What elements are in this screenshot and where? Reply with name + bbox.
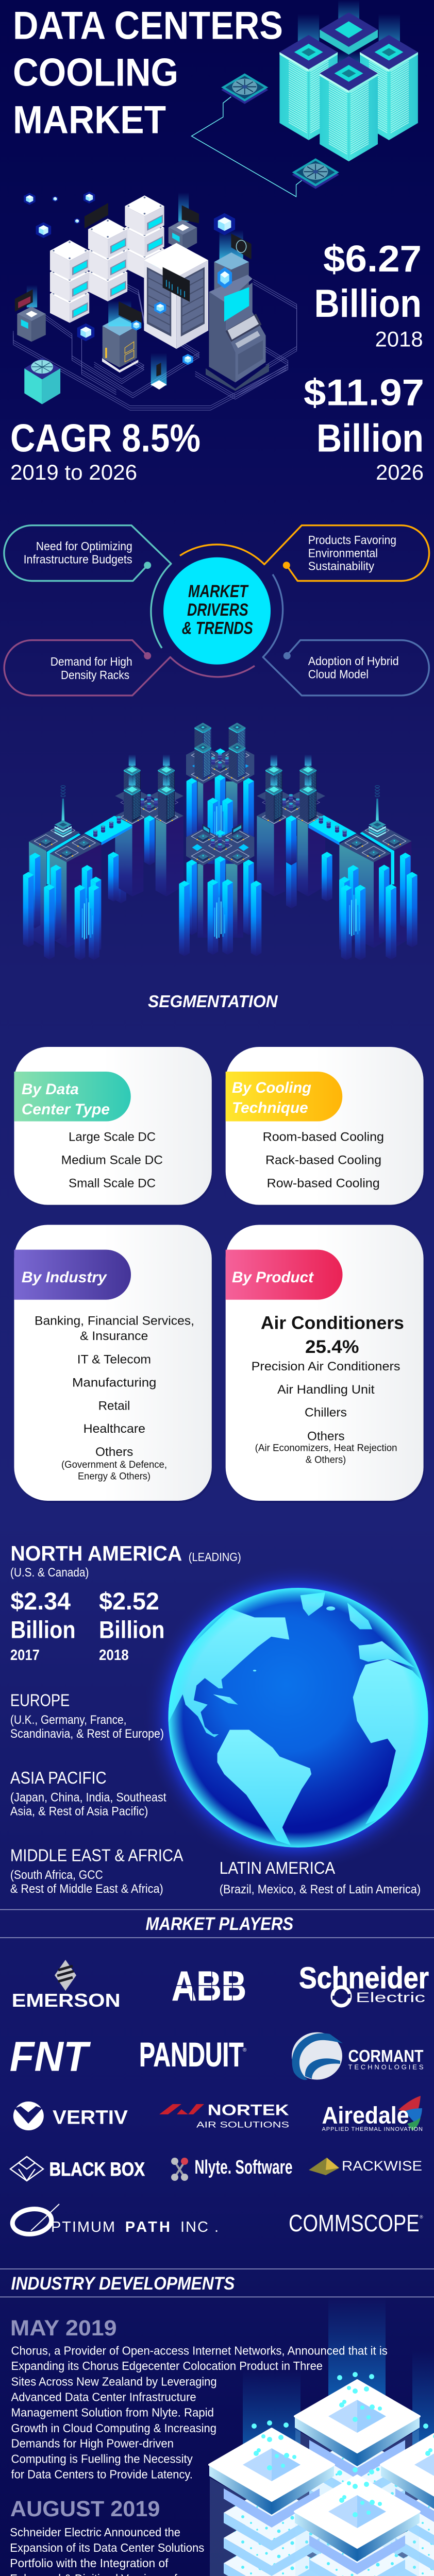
development: May 2019: Advanced Data Center Infrastructure (11, 2391, 196, 2404)
market size 2026: 2026 (376, 460, 424, 484)
panel: by industry: Banking, Financial Services, (35, 1314, 194, 1328)
development: May 2019: Computing is Fuelling the Necessity (11, 2452, 193, 2466)
region: europe: (U.K., Germany, France, (10, 1713, 126, 1727)
illustration: server towers on stacked plates (176, 2297, 434, 2576)
development: May 2019: Demands for High Power-driven (11, 2437, 174, 2450)
panel: by product (226, 1225, 425, 1503)
panel: by product: Air Conditioners (261, 1313, 404, 1333)
icon: laptops (203, 823, 242, 835)
market size 2018: 2018 (375, 327, 423, 351)
panel: by product: Others (307, 1429, 345, 1443)
logo: Nortek Air Solutions: AIR SOLUTIONS (196, 2120, 289, 2130)
panel: by industry: By Industry (22, 1269, 107, 1286)
development: August 2019: Schneider Electric Announced the (10, 2526, 180, 2539)
region: asia pacific (10, 1768, 166, 1818)
driver text: high density racks: Density Racks (61, 668, 129, 682)
development: May 2019: MAY 2019 (10, 2316, 117, 2341)
logo: ABB: ABB (172, 1963, 246, 2010)
logo: Cormant Technologies: CORMANT (348, 2046, 424, 2065)
title: COOLING (13, 51, 178, 95)
callout outlines (4, 526, 429, 696)
driver text: infrastructure budgets (24, 539, 132, 566)
logo: Black Box: BLACK BOX (49, 2159, 145, 2180)
driver text: high density racks (51, 655, 132, 682)
logo: FNT: FNT (10, 2033, 91, 2080)
kiosk terminal and fan cube (24, 267, 269, 404)
region: asia pacific: Asia, & Rest of Asia Pacific) (10, 1804, 148, 1818)
panel: by data center type: Large Scale DC (69, 1130, 156, 1144)
logo: Optimum Path: PTIMUM (51, 2219, 115, 2235)
icon: antenna (369, 786, 386, 837)
center unit (102, 300, 138, 372)
panel: by product: Air Handling Unit (277, 1383, 375, 1397)
panel: by cooling technique: Row-based Cooling (267, 1176, 380, 1190)
region: europe (10, 1691, 164, 1741)
region: middle east and africa: & Rest of Middle East & Africa) (10, 1882, 163, 1896)
development: May 2019 (10, 2316, 388, 2481)
icon: fan cube (24, 358, 60, 404)
skyline: left blocks (23, 786, 126, 960)
panel: by data center type: By Data (22, 1081, 79, 1098)
bridge (84, 816, 132, 845)
region: north america: 2018 (99, 1647, 129, 1664)
panel: by cooling technique: By Cooling (232, 1079, 311, 1096)
logo: CommScope: ® (420, 2214, 423, 2219)
logo: Rackwise (309, 2158, 422, 2175)
skyline: mid-left cluster (84, 754, 183, 902)
panel: by product: & Others) (306, 1455, 346, 1465)
panel: by industry: (Government & Defence, (61, 1460, 167, 1470)
logo: Vertiv (13, 2102, 128, 2130)
center heading: & TRENDS (182, 618, 253, 638)
development: May 2019: Sites Across New Zealand by Leveraging (11, 2375, 216, 2388)
driver text: hybrid cloud: Adoption of Hybrid (308, 654, 399, 668)
driver text: infrastructure budgets: Infrastructure Budgets (24, 553, 132, 566)
panel: by data center type: Center Type (22, 1101, 110, 1118)
region: north america: 2017 (10, 1647, 40, 1664)
center heading (182, 582, 253, 638)
logo: Cormant Technologies: TECHNOLOGIES (348, 2063, 424, 2071)
market size 2018 (314, 239, 423, 351)
icon: floating hexagons (24, 192, 235, 238)
skyline: mid-right cluster (257, 754, 325, 908)
region: middle east and africa: MIDDLE EAST & AFRICA (10, 1845, 183, 1865)
region: middle east and africa: (South Africa, GCC (10, 1868, 103, 1882)
panel: by product: Precision Air Conditioners (252, 1360, 400, 1374)
panel: market drivers and trends (4, 526, 429, 696)
logo: Emerson: EMERSON (12, 1990, 121, 2011)
icon: antenna (55, 786, 72, 837)
region: asia pacific: ASIA PACIFIC (10, 1768, 107, 1787)
server rack (144, 243, 208, 349)
CAGR: CAGR 8.5% (10, 417, 201, 461)
region: north america: Billion (10, 1616, 76, 1643)
logo: Black Box (10, 2157, 145, 2181)
development: May 2019: Management Solution from Nlyte. Rapid (11, 2405, 214, 2419)
skyline: right blocks (308, 786, 418, 960)
driver text: infrastructure budgets: Need for Optimizing (36, 539, 132, 553)
region: north america: $2.34 (10, 1587, 71, 1615)
driver text: environmental sustainability: Products Favoring (308, 533, 396, 547)
region: europe: Scandinavia, & Rest of Europe) (10, 1727, 164, 1741)
heading: segmentation: SEGMENTATION (148, 992, 278, 1011)
icon: hexagons in front (77, 301, 193, 365)
development: May 2019: for Data Centers to Provide Latency. (11, 2468, 193, 2481)
panel: by industry: Healthcare (84, 1422, 145, 1436)
CAGR (10, 417, 201, 484)
development: May 2019: Chorus, a Provider of Open-access Internet Networks, Announced that it is (11, 2344, 388, 2357)
panel: by industry: IT & Telecom (77, 1353, 151, 1367)
development: August 2019 (10, 2497, 204, 2576)
dark info panels (15, 203, 252, 326)
region: north america (10, 1541, 241, 1664)
driver text: hybrid cloud (308, 654, 399, 681)
logo: Airedale (322, 2096, 423, 2132)
development: May 2019: Expanding its Chorus Edgecenter Colocation Product in Three (11, 2359, 323, 2372)
white boxes (50, 195, 164, 323)
panel: by product: (Air Economizers, Heat Rejection (255, 1443, 397, 1454)
center heading: DRIVERS (187, 600, 248, 620)
hero: server illustration (15, 192, 252, 372)
market size 2018: Billion (314, 282, 422, 326)
driver text: high density racks: Demand for High (51, 655, 132, 668)
left unit (17, 307, 46, 342)
globe (143, 1563, 434, 1872)
market size 2018: $6.27 (323, 239, 422, 280)
driver text: environmental sustainability (308, 533, 396, 572)
panel: by data center type: Small Scale DC (69, 1176, 156, 1190)
back unit (169, 220, 197, 251)
skyline: center lower cluster (179, 823, 261, 956)
region: north america: $2.52 (99, 1587, 159, 1615)
panel: by industry: & Insurance (80, 1329, 148, 1343)
region: latin america (220, 1858, 421, 1896)
logo: Nlyte Software: Nlyte. Software (195, 2157, 293, 2178)
development: August 2019: AUGUST 2019 (10, 2497, 160, 2521)
skyline: center upper cluster (186, 723, 254, 873)
continents (166, 1592, 434, 1845)
circuit traces behind equipment (13, 268, 297, 410)
driver text: hybrid cloud: Cloud Model (308, 668, 369, 681)
development: May 2019: Growth in Cloud Computing & Increasing (11, 2421, 216, 2435)
panel: by industry: Manufacturing (72, 1376, 156, 1390)
logo: Nortek Air Solutions: NORTEK (208, 2102, 289, 2119)
market size 2026: Billion (316, 417, 424, 461)
panel: by product: Chillers (305, 1406, 347, 1420)
title (13, 4, 283, 142)
region: north america: Billion (99, 1616, 165, 1643)
panel: by product: By Product (232, 1269, 314, 1286)
logo: Panduit: ® (243, 2047, 247, 2053)
logo: Optimum Path (11, 2204, 219, 2236)
logo: Rackwise: RACKWISE (342, 2158, 422, 2174)
region: middle east and africa (10, 1845, 183, 1896)
panel: by data center type (14, 1047, 213, 1207)
development: August 2019: Expansion of its Data Center Solutions (10, 2541, 204, 2554)
market size 2026 (304, 372, 424, 484)
panel: by cooling technique: Technique (232, 1099, 308, 1116)
region: north america: NORTH AMERICA (10, 1541, 182, 1565)
right unit (214, 252, 249, 300)
bridge (308, 815, 357, 845)
logo: Emerson (12, 1960, 121, 2011)
logo: Optimum Path: INC . (180, 2219, 219, 2235)
hero: data center towers and cooling fans (192, 0, 418, 197)
heading: industry developments: INDUSTRY DEVELOPMENTS (11, 2274, 235, 2294)
panel: by industry: Energy & Others) (78, 1471, 151, 1482)
logo: Panduit: PANDUIT (139, 2036, 244, 2074)
logo: Cormant Technologies (292, 2032, 424, 2080)
driver text: environmental sustainability: Environmental (308, 546, 378, 560)
panel: by industry (14, 1225, 213, 1503)
region: latin america: LATIN AMERICA (220, 1858, 335, 1877)
market size 2026: $11.97 (304, 372, 424, 413)
title: DATA CENTERS (13, 4, 283, 48)
title: MARKET (13, 98, 166, 142)
panel: by product: 25.4% (305, 1337, 359, 1357)
center heading: MARKET (188, 582, 249, 601)
logo: Airedale: APPLIED THERMAL INNOVATION (322, 2126, 423, 2132)
logo: Airedale: Airedale (322, 2102, 409, 2129)
driver text: environmental sustainability: Sustainability (308, 559, 374, 572)
panel: by cooling technique: Room-based Cooling (263, 1130, 384, 1144)
region: north america: (LEADING) (189, 1550, 241, 1564)
logo: Schneider Electric: Electric (356, 1990, 425, 2005)
panel: by data center type: Medium Scale DC (61, 1154, 163, 1167)
region: asia pacific: (Japan, China, India, Southeast (10, 1790, 166, 1804)
development: August 2019: Portfolio with the Integration of (10, 2556, 169, 2570)
region: europe: EUROPE (10, 1691, 70, 1710)
logo: Vertiv: VERTIV (53, 2107, 128, 2129)
panel: by cooling technique (226, 1047, 425, 1207)
bars under bridge (115, 828, 126, 903)
logo: Optimum Path: PATH (125, 2219, 170, 2235)
logo: Nlyte Software (171, 2157, 293, 2181)
panel: by industry: Others (95, 1445, 133, 1459)
panel: by industry: Retail (98, 1399, 130, 1413)
region: north america: (U.S. & Canada) (10, 1566, 89, 1580)
heading: market players: MARKET PLAYERS (145, 1914, 293, 1934)
beam with floating tag (151, 353, 166, 389)
logo: Nortek Air Solutions (159, 2102, 289, 2130)
CAGR: 2019 to 2026 (10, 460, 137, 484)
panel: by cooling technique: Rack-based Cooling (265, 1154, 381, 1167)
